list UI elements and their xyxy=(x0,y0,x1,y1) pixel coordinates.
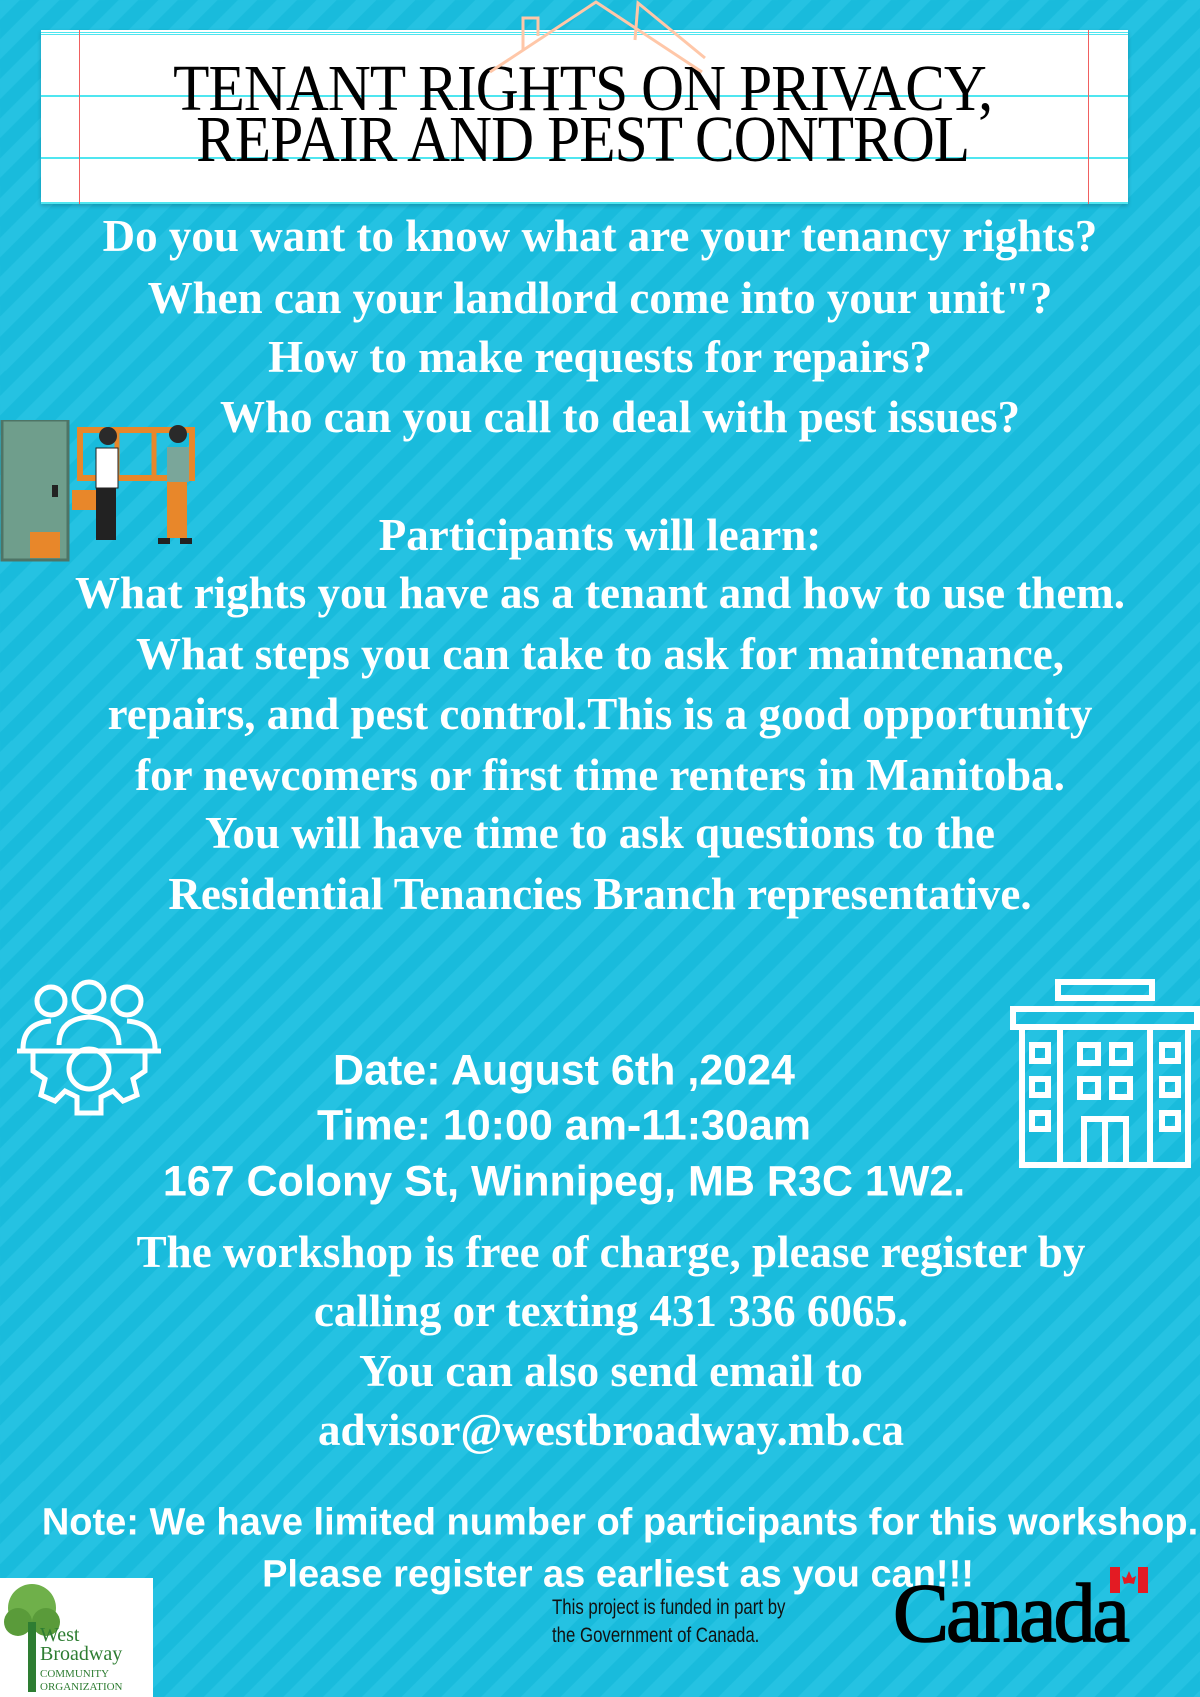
text: You will have time to ask questions to the xyxy=(205,808,995,858)
funding statement: This project is funded in part by xyxy=(552,1596,785,1619)
icon: people gear xyxy=(17,980,161,1116)
logo: West Broadway xyxy=(0,1578,153,1697)
text: Time: 10:00 am-11:30am xyxy=(317,1102,811,1150)
participants will learn block xyxy=(75,510,1125,919)
text: Please register as earliest as you can!!! xyxy=(262,1554,974,1596)
text: Participants will learn: xyxy=(379,510,821,560)
title text: TENANT RIGHTS ON PRIVACY, xyxy=(173,52,992,125)
text: Who can you call to deal with pest issues? xyxy=(220,392,1020,442)
text: Residential Tenancies Branch representative. xyxy=(168,869,1032,919)
title panel xyxy=(41,30,1128,204)
text: How to make requests for repairs? xyxy=(268,332,932,382)
text: Date: August 6th ,2024 xyxy=(333,1046,795,1094)
text: When can your landlord come into your unit"? xyxy=(148,273,1052,323)
event details xyxy=(163,1046,965,1206)
intro questions xyxy=(103,211,1097,442)
registration info xyxy=(137,1227,1085,1455)
funding statement: the Government of Canada. xyxy=(552,1624,759,1647)
text: The workshop is free of charge, please register by xyxy=(137,1227,1085,1277)
funding statement xyxy=(552,1596,786,1647)
text: What steps you can take to ask for maintenance, xyxy=(136,629,1064,679)
Canada wordmark: Canada xyxy=(893,1567,1127,1660)
note xyxy=(42,1502,1198,1596)
text: Note: We have limited number of participants for this workshop. xyxy=(42,1502,1198,1544)
text: for newcomers or first time renters in Manitoba. xyxy=(135,750,1065,800)
logo: West Broadway: West xyxy=(40,1624,80,1646)
text: calling or texting 431 336 6065. xyxy=(314,1286,908,1336)
text: Do you want to know what are your tenancy rights? xyxy=(103,211,1097,261)
title text: REPAIR AND PEST CONTROL xyxy=(196,103,969,176)
logo: West Broadway: ORGANIZATION xyxy=(40,1681,122,1693)
logo: West Broadway: Broadway xyxy=(40,1643,122,1665)
title text xyxy=(173,52,992,176)
roof icon xyxy=(489,0,706,74)
text: repairs, and pest control.This is a good opportunity xyxy=(108,689,1092,739)
illustration: tenant receiving keys xyxy=(0,420,195,562)
text: 167 Colony St, Winnipeg, MB R3C 1W2. xyxy=(163,1158,965,1206)
icon: building xyxy=(1010,979,1200,1168)
text: What rights you have as a tenant and how to use them. xyxy=(75,568,1125,618)
logo: West Broadway: COMMUNITY xyxy=(40,1668,109,1680)
text: You can also send email to xyxy=(359,1346,863,1396)
text: advisor@westbroadway.mb.ca xyxy=(318,1405,904,1455)
